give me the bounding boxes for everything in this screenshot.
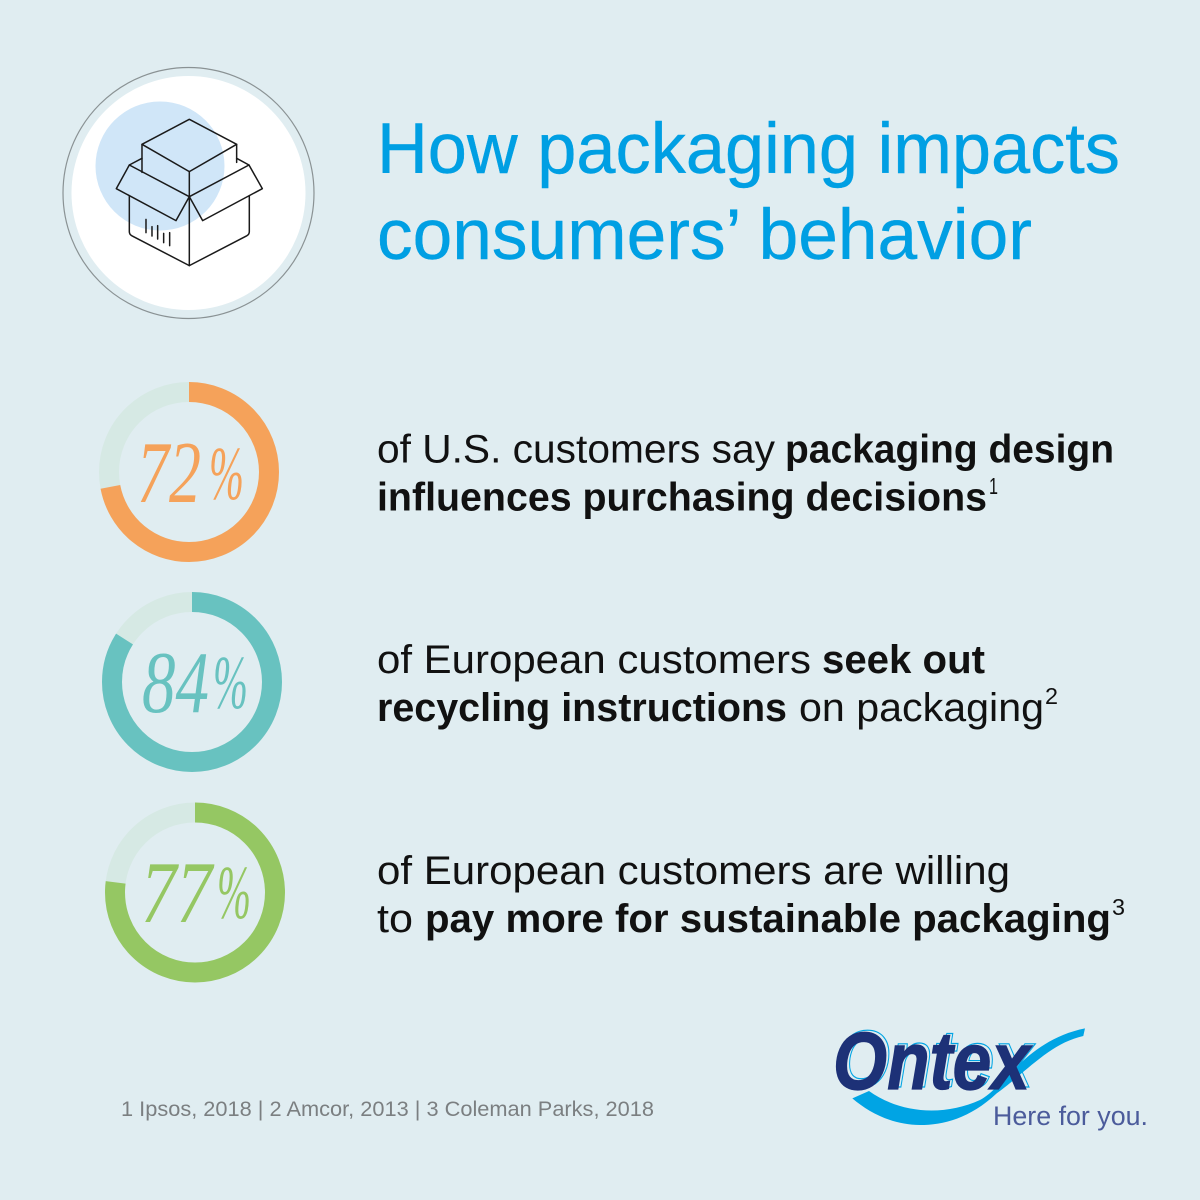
donut chart: 77%: % xyxy=(217,851,251,935)
statistic text: 84%: of European customers xyxy=(377,638,811,682)
statistic text: 72%: of U.S. customers say xyxy=(377,428,775,472)
donut chart: 72%: % xyxy=(209,432,244,516)
donut chart: 72%: 72 xyxy=(137,425,201,522)
statistic text: 84% xyxy=(377,638,1058,730)
footnote sources: 1 Ipsos, 2018 | 2 Amcor, 2013 | 3 Coleman Parks, 2018 xyxy=(121,1098,654,1121)
title xyxy=(377,110,1120,275)
statistic text: 77%: of European customers are willing xyxy=(377,849,1010,893)
statistic text: 77%: pay more for sustainable packaging xyxy=(425,897,1111,941)
statistic text: 84%: seek out xyxy=(822,638,985,682)
statistic text: 84%: 2 xyxy=(1045,683,1058,709)
icon: packaging box in circle xyxy=(63,68,314,318)
statistic text: 77%: to xyxy=(377,897,413,941)
donut chart: 77%: 77 xyxy=(141,845,215,942)
logo wordmark: Ontex xyxy=(833,1016,1033,1107)
logo swoosh xyxy=(852,1028,1085,1125)
statistic text: 77%: 3 xyxy=(1112,894,1125,920)
logo tagline: Here for you. xyxy=(993,1101,1148,1131)
statistic text: 72% xyxy=(377,428,1114,520)
donut chart: 84%: % xyxy=(213,641,248,725)
donut chart: 84% xyxy=(112,602,272,762)
statistic text: 84%: on packaging xyxy=(799,686,1044,730)
donut chart: 77% xyxy=(115,812,275,972)
statistic text: 84%: recycling instructions xyxy=(377,686,787,730)
title: consumers’ behavior xyxy=(377,196,1032,275)
logo: Ontex xyxy=(833,1014,1148,1131)
logo wordmark: Ontex xyxy=(836,1014,1036,1105)
statistic text: 77% xyxy=(377,849,1125,941)
donut chart: 72% xyxy=(109,392,269,552)
statistic text: 72%: 1 xyxy=(989,473,998,499)
donut chart: 84%: 84 xyxy=(142,635,209,732)
statistic text: 72%: packaging design xyxy=(785,428,1114,472)
statistic text: 72%: influences purchasing decisions xyxy=(377,476,987,520)
title: How packaging impacts xyxy=(377,110,1120,189)
